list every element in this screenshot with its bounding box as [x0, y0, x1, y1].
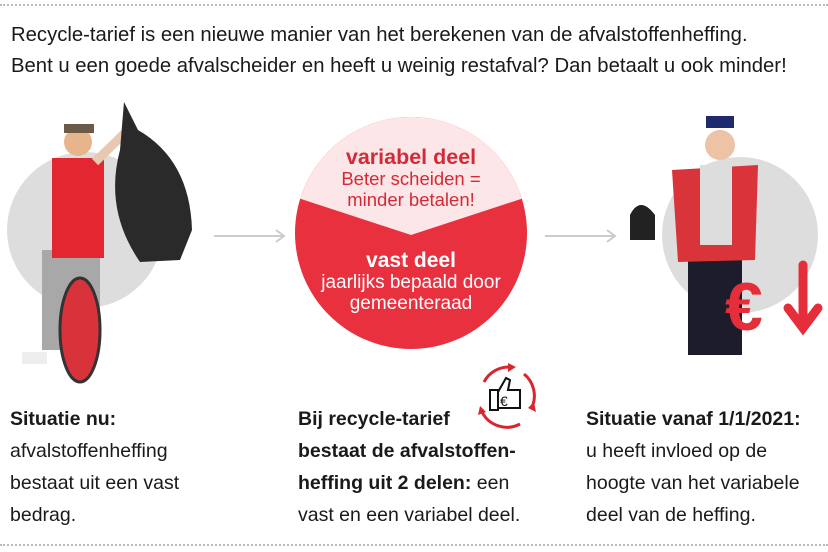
text: vast deel: jaarlijks bepaald door	[321, 272, 501, 293]
text: bij recycle-tarief: heffing uit 2 delen: een	[298, 472, 509, 494]
circle: variabel / vast deel	[295, 117, 527, 349]
text: vast deel: vast deel	[366, 249, 456, 272]
illustration: right person with small bag and euro down: €	[725, 269, 763, 345]
text: bij recycle-tarief: bestaat de afvalstoffen-	[298, 440, 516, 462]
text: bij recycle-tarief	[298, 408, 520, 526]
title	[11, 24, 787, 77]
title: Recycle-tarief is een nieuwe manier van het berekenen van de afvalstoffenheffing.	[11, 24, 748, 46]
arrow	[214, 229, 286, 243]
illustration: left person with bag	[7, 102, 192, 384]
icon: recycle thumbs up euro: €	[500, 393, 508, 409]
text: variabel deel	[341, 145, 481, 210]
illustration: right person with small bag and euro down	[630, 116, 822, 355]
text: situatie nu: Situatie nu:	[10, 408, 116, 430]
text: variabel deel: minder betalen!	[347, 189, 475, 210]
text: situatie vanaf 2021: hoogte van het variabele	[586, 472, 800, 494]
text: situatie nu	[10, 408, 180, 526]
text: situatie nu: bestaat uit een vast	[10, 472, 179, 494]
text: situatie nu: afvalstoffenheffing	[10, 440, 168, 462]
text: situatie vanaf 2021: Situatie vanaf 1/1/2021:	[586, 408, 801, 430]
text: situatie vanaf 2021: u heeft invloed op de	[586, 440, 767, 462]
text: situatie vanaf 2021	[586, 408, 801, 526]
text: bij recycle-tarief: Bij recycle-tarief	[298, 408, 450, 430]
text: situatie nu: bedrag.	[10, 504, 76, 526]
text: variabel deel: variabel deel	[346, 145, 476, 169]
text: situatie vanaf 2021: deel van de heffing.	[586, 504, 756, 526]
text: vast deel	[320, 249, 501, 314]
title: Bent u een goede afvalscheider en heeft u weinig restafval? Dan betaalt u ook minder!	[11, 55, 787, 77]
text: vast deel: gemeenteraad	[350, 293, 472, 314]
arrow	[545, 229, 616, 243]
text: variabel deel: Beter scheiden =	[341, 168, 481, 189]
icon: recycle thumbs up euro	[478, 363, 536, 429]
text: bij recycle-tarief: vast en een variabel deel.	[298, 504, 520, 526]
